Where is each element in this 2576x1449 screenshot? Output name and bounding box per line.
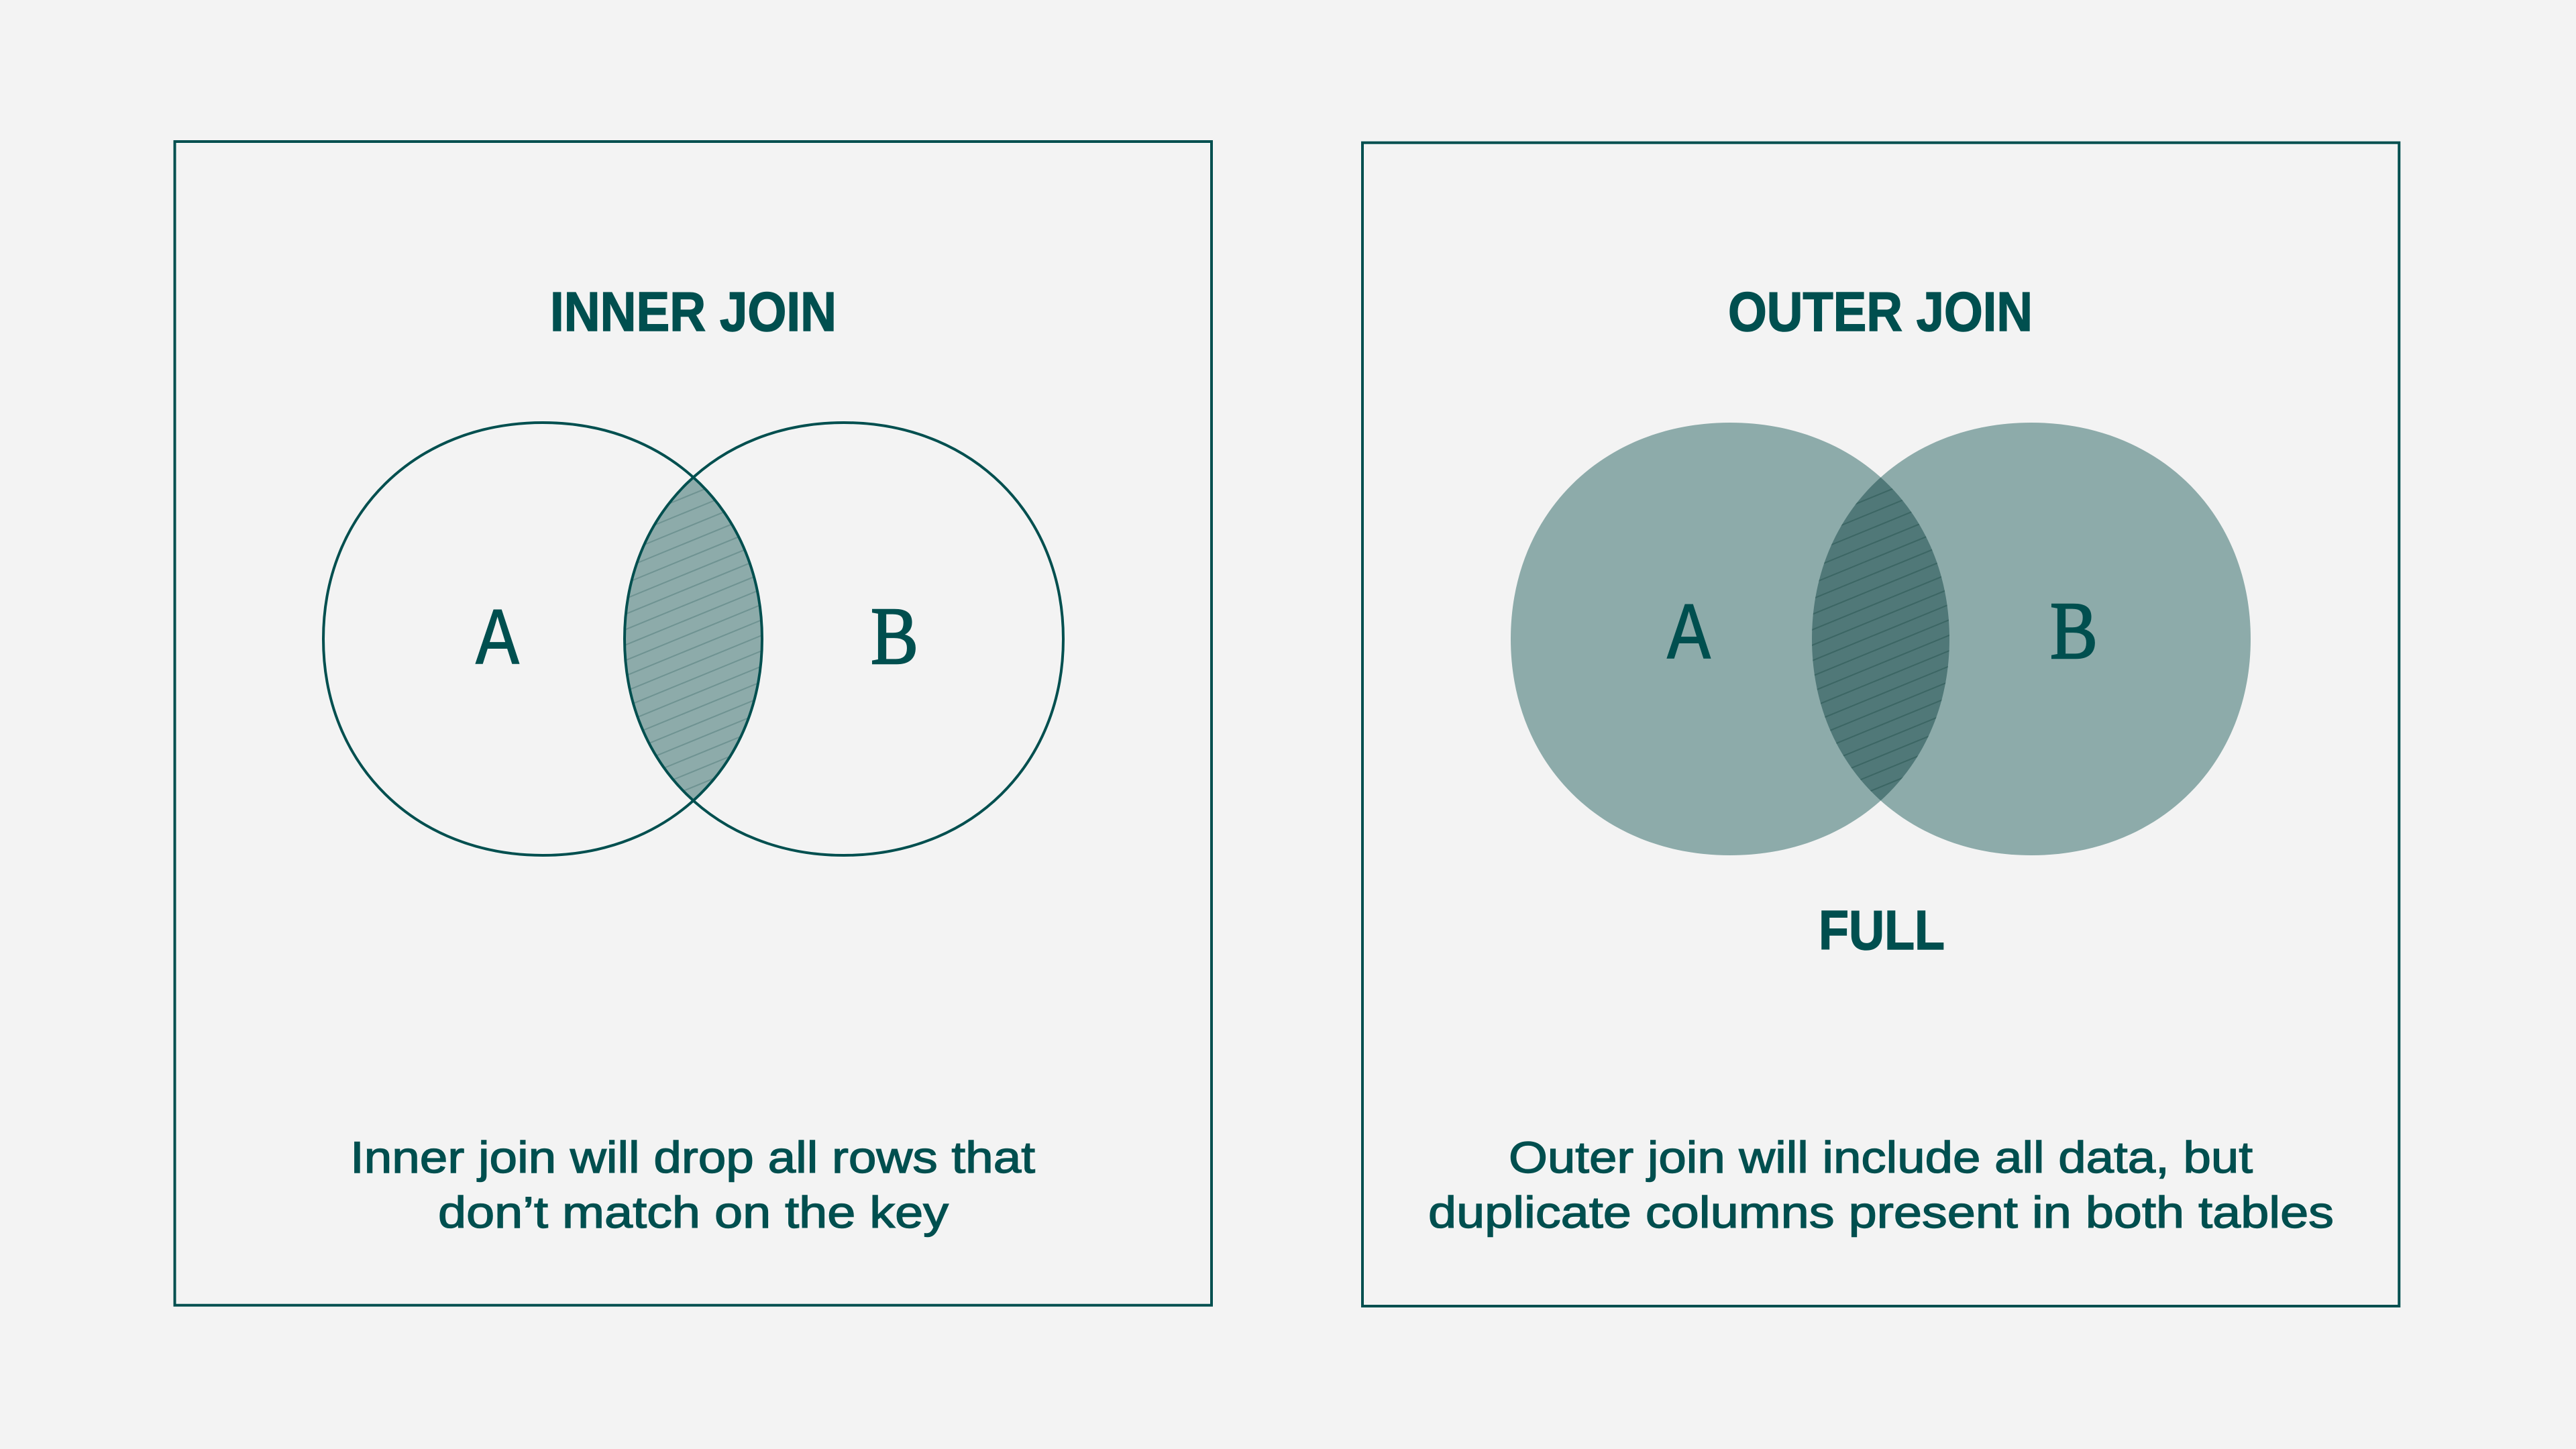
description: outer join: duplicate columns present in both tables (1428, 1187, 2334, 1237)
intersection: dark overlap (1812, 478, 1949, 801)
heading: outer join: OUTER JOIN (1728, 280, 2033, 343)
description: inner join (350, 1132, 1035, 1237)
label A: A (1667, 590, 1711, 683)
venn diagram: outer join (1511, 423, 2251, 855)
circle A filled (1511, 423, 1949, 855)
description: outer join: Outer join will include all data, but (1509, 1132, 2253, 1182)
circle B filled (1812, 423, 2251, 855)
label: full: FULL (1819, 899, 1945, 961)
label A: A (476, 595, 520, 688)
panel frame: outer join (1362, 143, 2399, 1306)
description: inner join: don’t match on the key (438, 1187, 949, 1237)
label B: B (2050, 586, 2098, 676)
venn diagram: inner join (323, 423, 1063, 855)
intersection: shaded overlap (626, 479, 761, 798)
description: outer join (1428, 1132, 2334, 1237)
heading: inner join: INNER JOIN (550, 280, 837, 343)
circle A outline (323, 423, 762, 855)
panel frame: inner join (174, 142, 1212, 1305)
circle B outline (625, 423, 1063, 855)
label B: B (871, 591, 918, 682)
panel: outer join (1362, 143, 2399, 1306)
description: inner join: Inner join will drop all rows that (350, 1132, 1035, 1182)
panel: inner join (174, 142, 1212, 1305)
